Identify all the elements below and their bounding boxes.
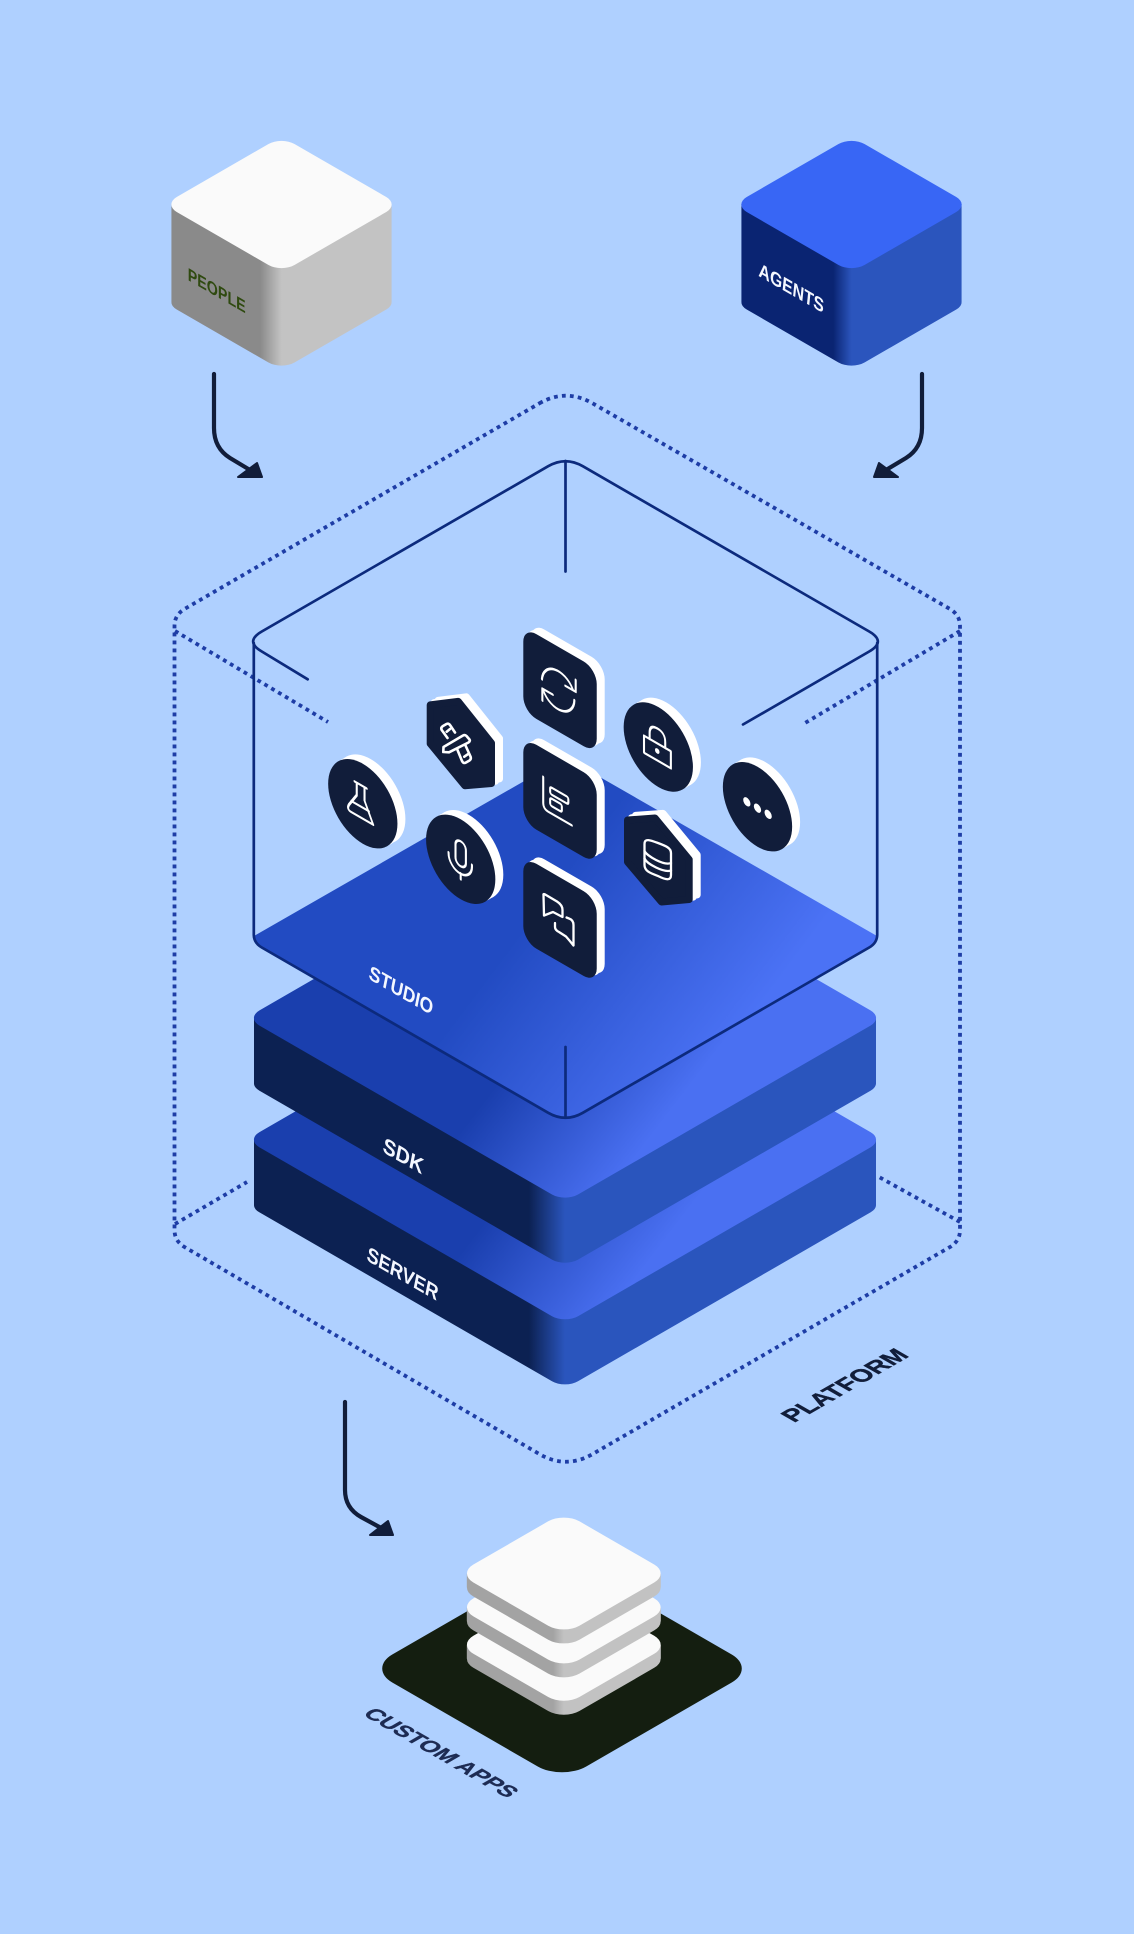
layer: sdk <box>254 979 876 1263</box>
platform dotted outline <box>174 396 960 1462</box>
icon: chart tile <box>523 728 605 869</box>
arrow: platform to custom apps <box>345 1402 393 1535</box>
cube: agents <box>741 140 962 366</box>
arrow: agents to platform <box>874 374 922 477</box>
stack layer: middle <box>466 1598 661 1678</box>
infographic: platform isometric diagram <box>171 140 962 1797</box>
stack layer: top <box>466 1518 661 1644</box>
studio wireframe box <box>253 461 878 1118</box>
label: custom apps: CUSTOM APPS <box>358 1704 525 1801</box>
icon: sync tile <box>523 617 605 758</box>
custom apps base <box>368 1556 756 1780</box>
label: people: PEOPLE <box>188 264 246 318</box>
icon: more disc <box>723 738 800 871</box>
label: agents: AGENTS <box>758 260 825 318</box>
label: studio: STUDIO <box>367 962 435 1020</box>
icon: lock disc <box>624 678 701 812</box>
icon: chat tile <box>523 847 605 988</box>
layer: studio <box>254 759 877 1118</box>
icon: database badge <box>628 813 697 902</box>
stack layer: bottom <box>466 1633 661 1715</box>
icon: microphone disc <box>426 790 503 924</box>
arrow: people to platform <box>214 374 262 477</box>
icon: ruler and pencil badge <box>430 697 500 786</box>
cube: people <box>171 140 392 366</box>
label: platform: PLATFORM <box>775 1345 915 1426</box>
label: sdk: SDK <box>381 1134 426 1180</box>
layer: server <box>254 1112 876 1384</box>
custom apps stack <box>466 1518 661 1715</box>
label: server: SERVER <box>365 1243 440 1306</box>
icon: flask disc <box>328 734 405 868</box>
